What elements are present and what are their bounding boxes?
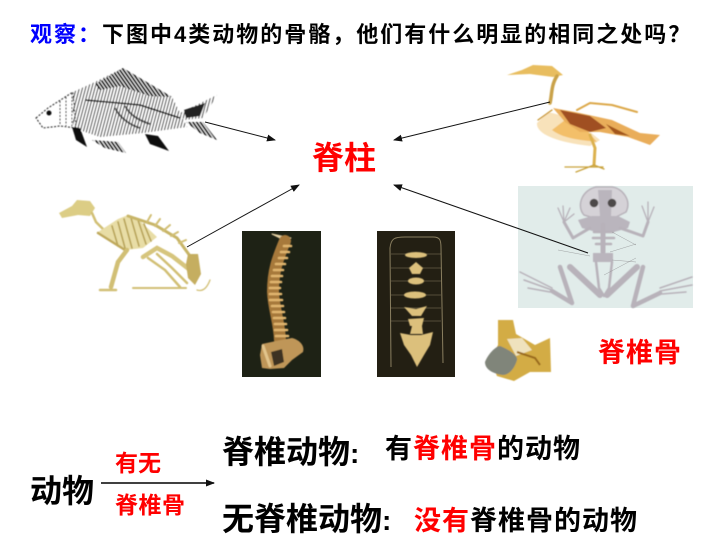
image: vertebra: [485, 320, 551, 381]
label: vertebra: 脊椎骨: [598, 338, 682, 368]
arrow: classification: [101, 482, 214, 484]
definition: vertebrates: 有脊椎骨的动物: [385, 434, 581, 464]
image: separated vertebrae: [377, 231, 455, 377]
arrow: rabbit to spine: [187, 185, 299, 247]
definition: invertebrates: 没有脊椎骨的动物: [414, 506, 638, 536]
label: vertebrates: 脊椎动物:: [222, 434, 359, 470]
arrow: bird to spine: [394, 102, 550, 140]
label: animals: 动物: [30, 473, 94, 509]
title: 观察：下图中4类动物的骨骼，他们有什么明显的相同之处吗？: [30, 22, 692, 47]
image: frog skeleton: [518, 186, 693, 308]
label: presence or absence: 有无: [115, 450, 161, 476]
arrow: frog to spine: [394, 185, 588, 253]
image: spine side view: [242, 231, 321, 377]
arrow: fish to spine: [205, 122, 275, 140]
label: invertebrates: 无脊椎动物:: [222, 501, 391, 537]
image: bird skeleton: [507, 65, 660, 172]
label: vertebra condition: 脊椎骨: [115, 492, 186, 518]
image: fish skeleton: [36, 68, 217, 153]
image: rabbit skeleton: [59, 200, 210, 291]
label: spine: 脊柱: [312, 140, 376, 176]
